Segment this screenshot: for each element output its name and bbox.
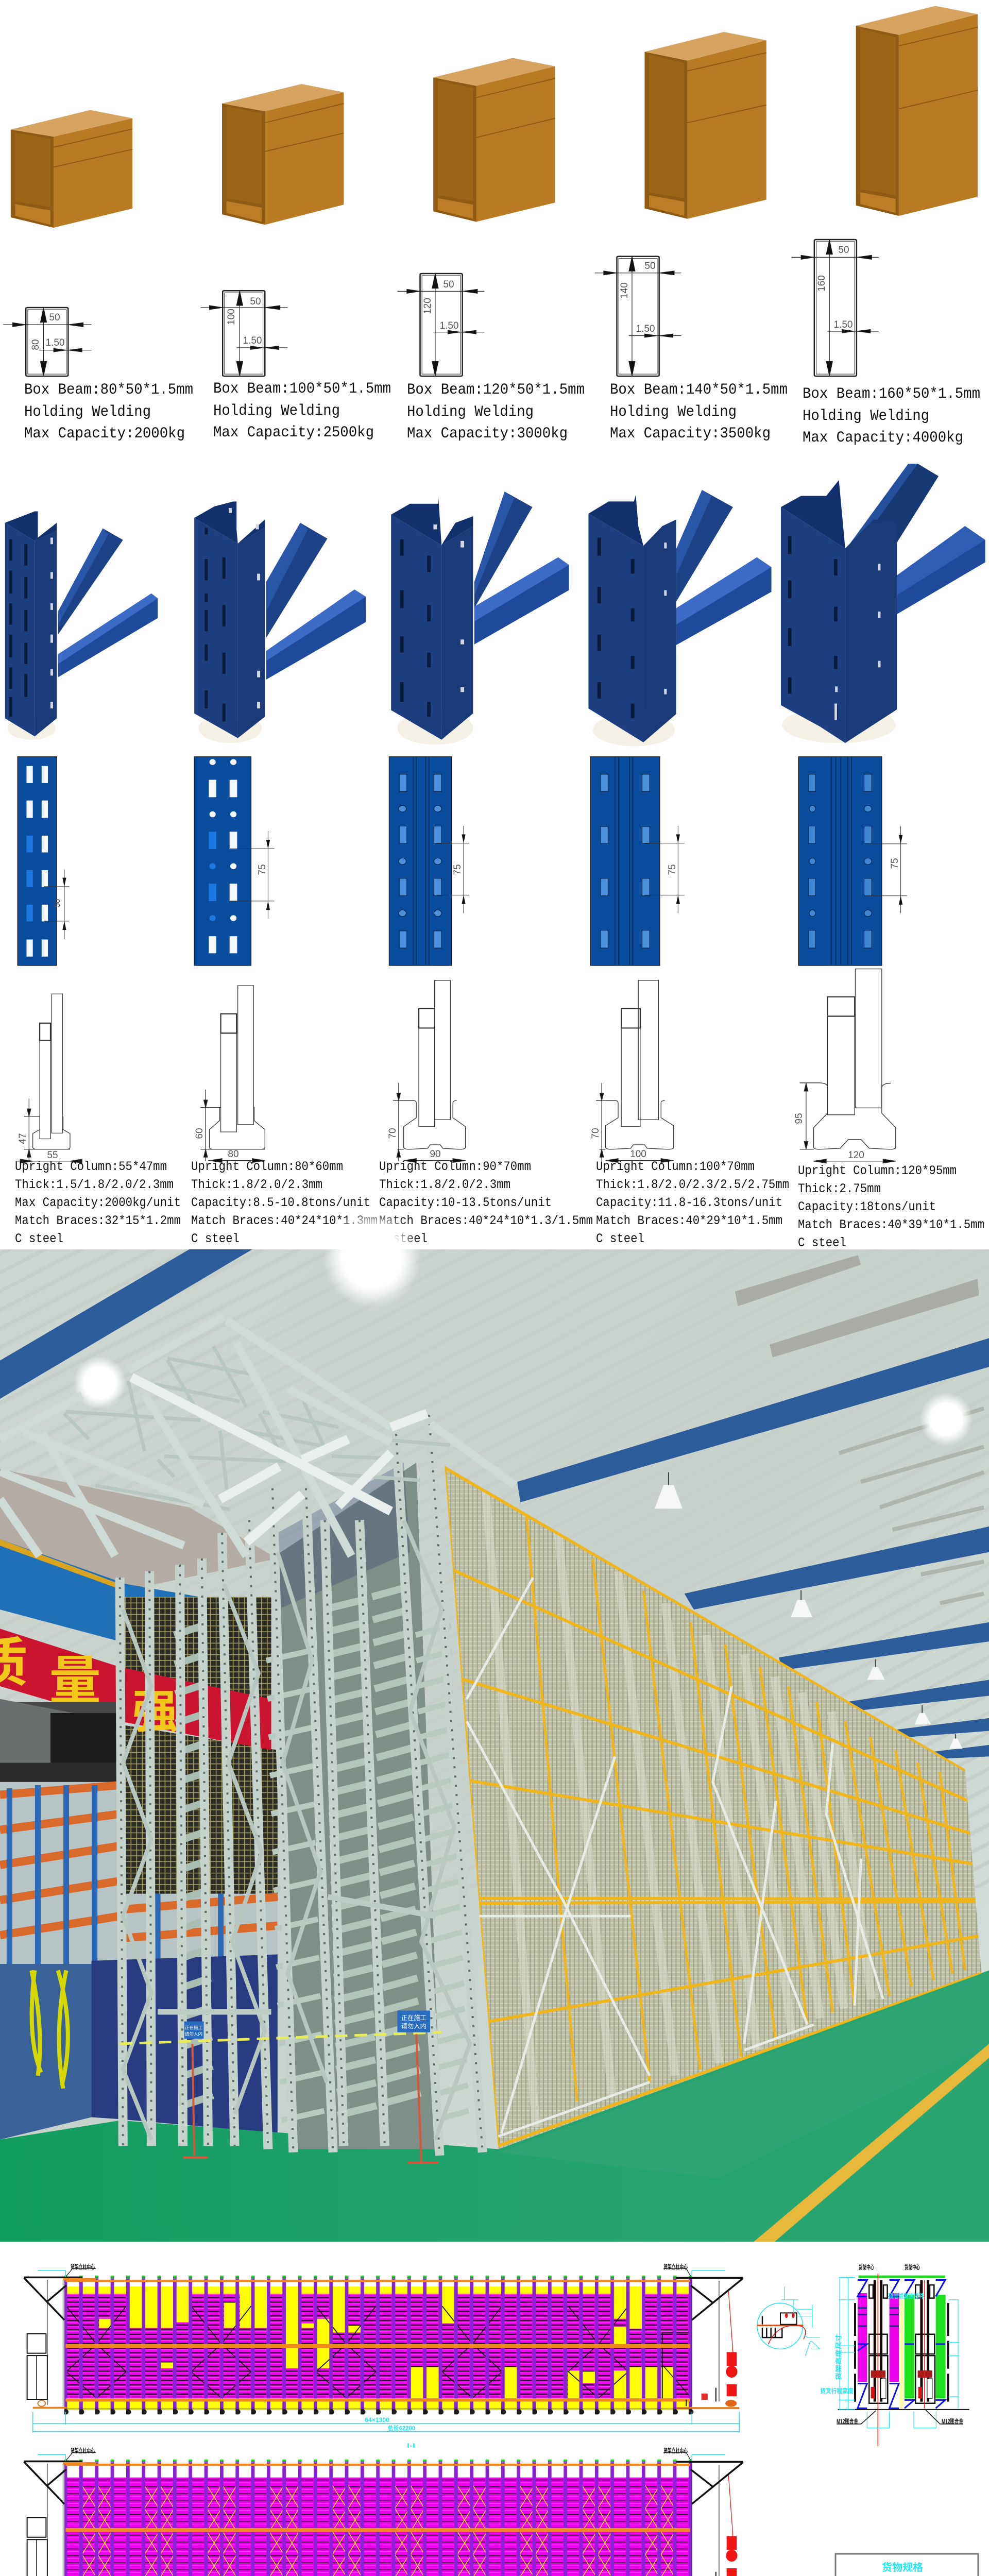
text: box beam 120 spec: Max Capacity:3000kg (407, 425, 568, 443)
cross section 100x70 (596, 980, 674, 1162)
text: box beam 100 spec (213, 380, 391, 442)
box beam 120 (433, 58, 555, 222)
flat upright 90 (389, 757, 469, 965)
text: upright 80x60 spec (191, 1159, 378, 1246)
box beam 160 (856, 6, 978, 216)
text: upright 80x60 spec: Thick:1.8/2.0/2.3mm (191, 1177, 322, 1192)
cross section dimension numbers: 55 (47, 1150, 58, 1161)
section dimension numbers: 140 (619, 282, 630, 299)
cargo spec title: 货物规格 (882, 2561, 923, 2573)
cross section drawings (16, 969, 896, 1163)
safety tape, poles and warning signs (120, 2011, 441, 2163)
elevation labels: 货架立柱中心 (663, 2447, 688, 2454)
text: box beam 80 spec: Max Capacity:2000kg (24, 425, 185, 443)
rack elevation (837, 2274, 969, 2446)
blue wall and yellow slings (0, 1954, 278, 2140)
text: box beam 80 spec (24, 381, 193, 443)
section 120 (397, 274, 484, 376)
text: box beam 80 spec: Box Beam:80*50*1.5mm (24, 381, 193, 399)
section dimension numbers: 1.50 (243, 335, 262, 346)
cross section dimension numbers: 60 (194, 1128, 205, 1139)
text: box beam 100 spec: Max Capacity:2500kg (213, 424, 374, 442)
cross section dimension numbers: 80 (228, 1149, 239, 1160)
background pallet racks (0, 1782, 278, 1964)
safety tape, poles and warning signs: 请勿入内 (401, 2023, 427, 2030)
upright 90x70 (391, 492, 569, 744)
elevation labels: 货架立柱中心 (663, 2263, 688, 2270)
cross section 80x60 (200, 986, 265, 1162)
text: upright 55x47 spec: C steel (15, 1231, 63, 1246)
upright 100x70 (588, 490, 772, 747)
text: upright 100x70 spec: Capacity:11.8-16.3tons/unit (596, 1195, 782, 1210)
text: box beam 100 spec: Holding Welding (213, 402, 340, 420)
flat upright 55 (18, 757, 70, 965)
section 140 (595, 257, 681, 376)
text: box beam 120 spec: Holding Welding (407, 403, 534, 421)
panel: upright column cross sections and specifications (15, 969, 984, 1250)
section elevation labels: 货架中心 (905, 2263, 920, 2271)
flat upright dimension numbers: 75 (257, 864, 268, 875)
box beam 140 (644, 32, 766, 219)
text: upright 90x70 spec: Thick:1.8/2.0/2.3mm (379, 1177, 510, 1192)
ceiling lights (73, 1209, 973, 1749)
section elevation labels: 顶层货架连接件 (888, 2292, 924, 2300)
text: upright 55x47 spec: Thick:1.5/1.8/2.0/2.3mm (15, 1177, 174, 1192)
text: upright 100x70 spec: Match Braces:40*29*10*1.5mm (596, 1213, 782, 1228)
elevation 1: magenta and yellow pallets (24, 2268, 743, 2433)
flat upright dimension numbers (53, 858, 900, 907)
text: upright 120x95 spec: Upright Column:120*95mm (798, 1163, 957, 1178)
section dimension numbers: 50 (644, 261, 656, 272)
cross section dimension numbers: 70 (387, 1128, 398, 1139)
section dimension numbers: 1.50 (46, 337, 64, 348)
text: upright 55x47 spec: Max Capacity:2000kg/unit (15, 1195, 181, 1210)
section elevation labels: 货架高度尺寸 (834, 2334, 842, 2380)
top truss (0, 1316, 515, 1556)
flat upright 120 (798, 757, 907, 965)
section dimension numbers: 1.50 (636, 324, 655, 334)
panel: 3D box beams (11, 6, 978, 228)
cross section 55x47 (16, 994, 82, 1163)
text: upright 90x70 spec: C steel (379, 1231, 428, 1246)
panel: 3D upright columns with braces (5, 464, 985, 747)
upright 55x47 (5, 511, 158, 740)
elevation labels: 总长62200 (387, 2424, 415, 2432)
text: upright 120x95 spec: Thick:2.75mm (798, 1181, 881, 1196)
text: upright 90x70 spec (379, 1159, 593, 1246)
text: box beam 160 spec: Max Capacity:4000kg (803, 429, 963, 447)
side cladding: mesh panels with yellow frame (441, 1466, 989, 2149)
section elevation labels: M12膨合金 (837, 2417, 858, 2425)
section 100 (200, 291, 287, 376)
safety tape, poles and warning signs: 请勿入内 (185, 2031, 202, 2037)
text: upright 80x60 spec: Capacity:8.5-10.8tons/unit (191, 1195, 370, 1210)
section elevation labels: 货架中心 (859, 2263, 874, 2271)
text: upright 55x47 spec: Upright Column:55*47mm (15, 1159, 167, 1174)
text: box beam 160 spec (803, 385, 980, 447)
text: upright 80x60 spec: C steel (191, 1231, 240, 1246)
text: box beam 140 spec: Holding Welding (610, 403, 737, 421)
elevation labels: 货架立柱中心 (71, 2447, 95, 2454)
section elevation labels: M12膨合金 (942, 2417, 963, 2425)
cross section 120x95 (800, 969, 896, 1163)
background factory: blue steel, dark mesh and banner: 强 (132, 1686, 178, 1738)
section elevation labels: 货叉行程高度 (820, 2387, 854, 2395)
text: upright 100x70 spec (596, 1159, 789, 1246)
text: upright 120x95 spec (798, 1163, 984, 1250)
box beam 100 (222, 84, 344, 225)
ceiling (0, 1249, 989, 2242)
panel: cargo specification box (835, 2554, 978, 2576)
bright truss members (131, 1377, 427, 1542)
section 80 (3, 308, 92, 376)
flat upright 100 (590, 757, 685, 965)
flat upright dimension numbers: 75 (452, 864, 463, 875)
cross section dimension numbers: 95 (794, 1113, 805, 1124)
cross section dimension numbers: 47 (18, 1133, 28, 1144)
box frame (835, 2554, 978, 2576)
section dimension numbers: 50 (250, 296, 261, 307)
cross section 90x70 (393, 980, 466, 1162)
section dimension numbers: 50 (49, 312, 60, 323)
section dimension numbers: 1.50 (440, 320, 458, 331)
cross section dimension numbers: 90 (430, 1149, 441, 1160)
panel: section elevation and detail circle (757, 2263, 969, 2446)
cross section dimension numbers (18, 1113, 864, 1161)
flat upright dimension numbers: 75 (890, 858, 900, 869)
text: upright 55x47 spec: Match Braces:32*15*1.2mm (15, 1213, 181, 1228)
text: box beam 140 spec: Max Capacity:3500kg (610, 425, 771, 443)
box beam 80 (11, 110, 132, 228)
text: upright 55x47 spec (15, 1159, 181, 1246)
section dimension numbers: 80 (30, 339, 41, 350)
thin secondary truss members (64, 1346, 450, 1510)
safety tape, poles and warning signs: 正在施工 (185, 2024, 202, 2030)
cross section dimension numbers: 70 (590, 1128, 601, 1139)
text: upright 120x95 spec: C steel (798, 1235, 846, 1250)
section drawings (3, 240, 879, 376)
text: upright 90x70 spec: Match Braces:40*24*10*1.3/1.5mm (379, 1213, 593, 1228)
background factory: blue steel, dark mesh and banner: 量 (49, 1652, 101, 1710)
panel: flat upright column faces (18, 757, 907, 965)
panel: warehouse photo of rack-clad structure (0, 1209, 989, 2242)
background factory: blue steel, dark mesh and banner (0, 1539, 278, 1897)
text: upright 100x70 spec: C steel (596, 1231, 644, 1246)
flat upright 80 (194, 757, 275, 965)
text: upright 120x95 spec: Capacity:18tons/unit (798, 1199, 936, 1214)
text: box beam 160 spec: Holding Welding (803, 408, 929, 425)
flat upright dimension numbers: 75 (667, 864, 678, 875)
elevation labels: I-I (407, 2442, 415, 2449)
elevation labels (71, 2263, 688, 2576)
upright 120x95 (781, 464, 985, 743)
main truss members (0, 1316, 515, 1556)
section dimension numbers: 120 (422, 298, 433, 314)
section dimension numbers: 50 (838, 245, 849, 256)
cross section dimension numbers: 100 (630, 1149, 646, 1160)
text: upright 100x70 spec: Upright Column:100*70mm (596, 1159, 755, 1174)
cross section dimension numbers: 120 (848, 1150, 864, 1161)
section dimension numbers: 100 (226, 309, 237, 325)
safety tape, poles and warning signs: 正在施工 (401, 2014, 427, 2022)
upright 80x60 (194, 501, 366, 743)
text: upright 90x70 spec: Upright Column:90*70mm (379, 1159, 531, 1174)
flat upright dimension numbers: 50 (53, 899, 62, 907)
section elevation geometry (757, 2274, 969, 2446)
text: box beam 80 spec: Holding Welding (24, 403, 151, 421)
flat upright drawings (18, 757, 907, 965)
panel: CAD elevation drawings (24, 2263, 743, 2576)
text: box beam 120 spec (407, 381, 585, 443)
elevation labels: 货架立柱中心 (71, 2263, 95, 2270)
front rack end: galvanized uprights, ladders and lacing (120, 1415, 483, 2156)
panel: box beam section drawings and specifications (3, 240, 980, 447)
section dimension numbers (30, 245, 852, 350)
elevation drawings geometry (24, 2268, 743, 2576)
text: upright 100x70 spec: Thick:1.8/2.0/2.3/2.5/2.75mm (596, 1177, 789, 1192)
text: upright 90x70 spec: Capacity:10-13.5tons/unit (379, 1195, 552, 1210)
text: box beam 140 spec: Box Beam:140*50*1.5mm (610, 381, 788, 399)
text: box beam 140 spec (610, 381, 788, 443)
section elevation labels (820, 2263, 963, 2425)
section 160 (792, 240, 879, 376)
green floor (0, 1970, 989, 2242)
elevation 2: magenta pallets with yellow cross braces (24, 2453, 743, 2576)
section dimension numbers: 160 (816, 275, 827, 292)
text: upright 80x60 spec: Upright Column:80*60mm (191, 1159, 343, 1174)
elevation labels: 64×1300 (365, 2416, 389, 2424)
section dimension numbers: 1.50 (834, 319, 852, 330)
text: box beam 100 spec: Box Beam:100*50*1.5mm (213, 380, 391, 398)
section dimension numbers: 50 (443, 279, 454, 290)
detail circle (757, 2286, 820, 2355)
text: box beam 120 spec: Box Beam:120*50*1.5mm (407, 381, 585, 399)
blue roof beams (0, 1249, 989, 1759)
text: upright 80x60 spec: Match Braces:40*24*10*1.3mm (191, 1213, 378, 1228)
